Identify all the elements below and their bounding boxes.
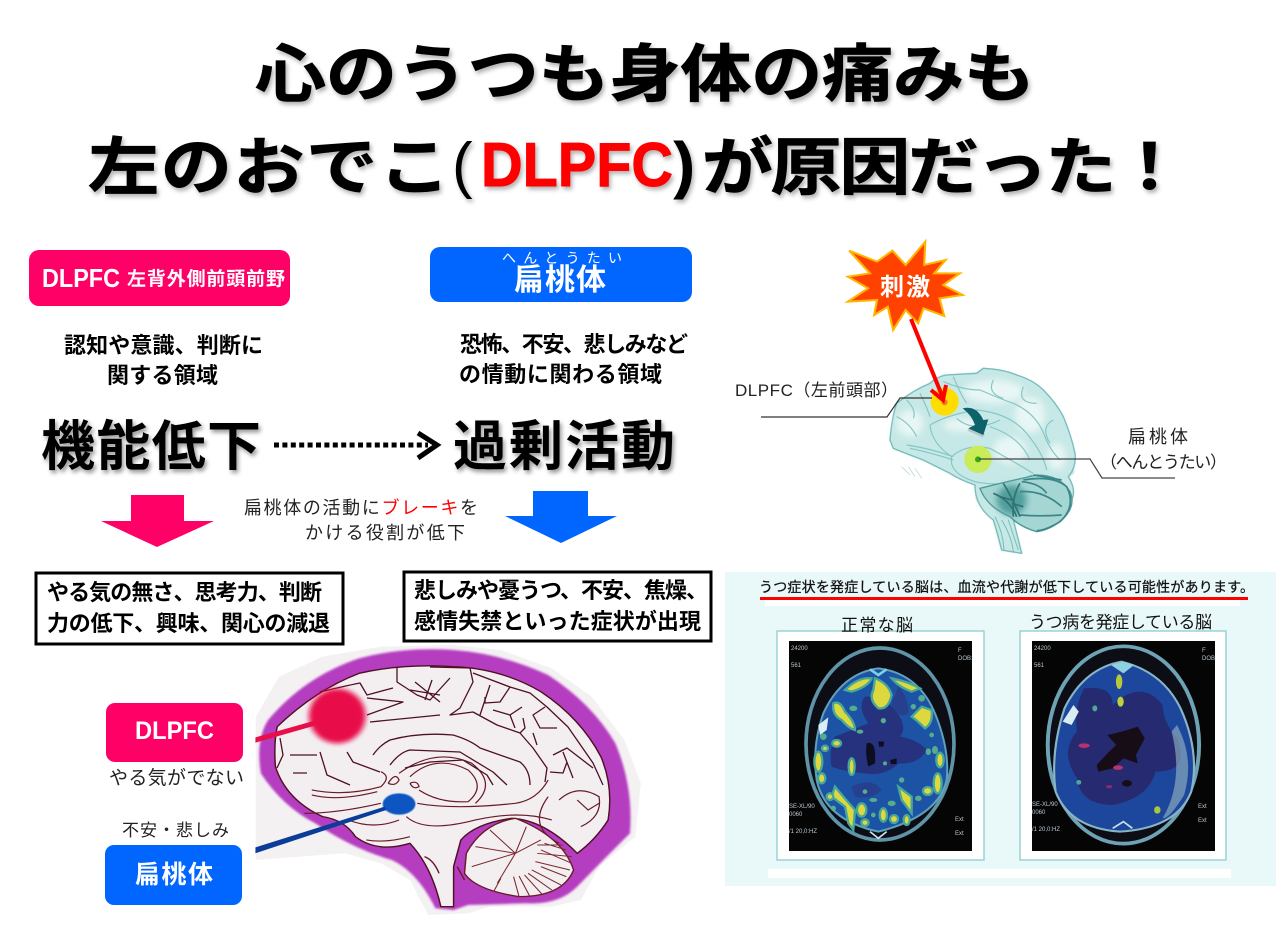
panel: amygdala header <box>430 247 692 302</box>
illustration: sagittal brain <box>255 645 641 915</box>
panel: DLPFC symptoms: 力の低下、興味、関心の減退 <box>47 611 330 636</box>
brainstem strands <box>995 517 1018 552</box>
text: amygdala role: の情動に関わる領域 <box>459 362 662 387</box>
label: DLPFC callout <box>735 381 932 417</box>
panel: DLPFC symptoms: やる気の無さ、思考力、判断 <box>47 580 322 605</box>
scan annotations: Ext <box>1198 818 1207 824</box>
frontal fibres <box>902 467 922 478</box>
arrow: pink down <box>101 495 214 547</box>
panel: DLPFC header <box>29 250 290 306</box>
scan annotations: Ext <box>955 817 964 823</box>
panel: amygdala header: 扁桃体 <box>514 264 606 297</box>
button: DLPFC <box>106 703 243 762</box>
scan annotations: Ext <box>955 831 964 837</box>
text: brake note: かける役割が低下 <box>305 523 465 543</box>
arrow: blue down <box>505 491 617 543</box>
arrow: stimulus to DLPFC <box>911 319 946 400</box>
text: amygdala role <box>459 332 688 387</box>
scan annotations: /1 20,0:HZ <box>1032 827 1060 833</box>
title: 心のうつも身体の痛みも <box>255 40 1035 110</box>
scan annotations: Ext <box>1198 804 1207 810</box>
scan annotations: F <box>958 648 962 654</box>
icon: stimulus starburst <box>848 242 963 330</box>
pointer: blue line <box>255 807 386 853</box>
panel: MRI comparison <box>725 572 1276 886</box>
title: ( <box>452 131 473 200</box>
DLPFC yellow spot <box>931 388 959 416</box>
heading: うつ症状を発症している脳は、血流や代謝が低下している可能性があります。 <box>759 579 1254 595</box>
dark curved arrow <box>963 408 988 437</box>
panel: amygdala symptoms: 悲しみや憂うつ、不安、焦燥、 <box>414 578 708 603</box>
caption: normal brain: 正常な脳 <box>841 616 913 635</box>
pointer: red line <box>255 718 323 743</box>
red DLPFC spot <box>309 689 366 743</box>
text: brake note <box>244 497 478 543</box>
title: 左のおでこ <box>88 133 450 203</box>
scan annotations: 24200 <box>791 646 808 652</box>
scan annotations: SE-XL/90 <box>1032 802 1058 808</box>
panel: amygdala header: へんとうたい <box>502 250 622 266</box>
button: amygdala: 扁桃体 <box>135 861 213 889</box>
highlights <box>897 380 1066 470</box>
button: DLPFC: DLPFC <box>135 717 214 745</box>
button: amygdala <box>105 845 242 905</box>
illustration: teal brain <box>890 368 1075 553</box>
title <box>88 40 1185 203</box>
scan annotations: DOB: <box>1202 656 1217 662</box>
label: amygdala callout: 扁桃体 <box>1128 427 1188 447</box>
scan annotations: 561 <box>791 663 802 669</box>
panel: DLPFC header: 左背外側前頭前野 <box>127 268 285 290</box>
title: DLPFC <box>481 131 673 200</box>
scan annotations: DOB: <box>958 656 973 662</box>
scan annotations: /1 20,0:HZ <box>789 829 817 835</box>
text: DLPFC role: 認知や意識、判断に <box>64 333 263 358</box>
scan annotations: 561 <box>1034 663 1045 669</box>
label: no motivation: やる気がでない <box>109 767 244 789</box>
title: が原因だった！ <box>702 133 1185 203</box>
icon: stimulus starburst: 刺激 <box>880 274 930 301</box>
panel: amygdala symptoms <box>404 572 711 641</box>
brainstem lines <box>425 857 465 880</box>
amygdala green spot <box>964 446 992 473</box>
text: amygdala role: 恐怖、不安、悲しみなど <box>460 332 688 357</box>
scan annotations: 0060 <box>1032 810 1046 816</box>
upper gyri <box>277 667 603 785</box>
blue amygdala spot <box>383 793 415 815</box>
text: overactivity: 過剰活動 <box>453 417 675 477</box>
scan annotations: F <box>1202 648 1206 654</box>
scan annotations <box>789 646 973 837</box>
cerebellum <box>465 818 574 897</box>
panel: DLPFC header: DLPFC <box>42 263 120 293</box>
label: amygdala callout <box>979 427 1227 478</box>
arrow: dotted connector <box>274 433 437 458</box>
scan annotations: 24200 <box>1034 646 1051 652</box>
cerebellum <box>980 475 1072 532</box>
scan annotations: SE-XL/90 <box>789 804 815 810</box>
text: brake note: 扁桃体の活動にブレーキを <box>244 497 478 518</box>
label: amygdala callout: （へんとうたい） <box>1100 453 1227 472</box>
scan: normal brain <box>777 631 984 860</box>
text: reduced function: 機能低下 <box>41 417 261 477</box>
title: ) <box>674 131 695 200</box>
scan: depressed brain <box>1020 631 1226 860</box>
text: DLPFC role: 関する領域 <box>107 363 218 388</box>
red underline <box>760 597 1248 600</box>
caption: depressed brain: うつ病を発症している脳 <box>1029 613 1212 632</box>
text: DLPFC role <box>64 333 263 388</box>
panel: DLPFC symptoms <box>36 573 343 644</box>
label: DLPFC callout: DLPFC（左前頭部） <box>735 381 898 400</box>
scan annotations <box>1032 646 1217 833</box>
scan annotations: 0060 <box>789 812 803 818</box>
panel: amygdala symptoms: 感情失禁といった症状が出現 <box>414 609 701 634</box>
label: anxiety and sadness: 不安・悲しみ <box>122 821 229 840</box>
